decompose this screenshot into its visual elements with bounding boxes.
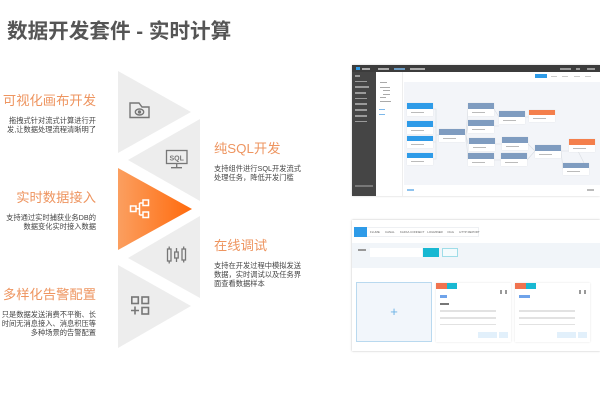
filter band bbox=[352, 243, 600, 268]
screenshot: connector config: HTTP REPORT bbox=[459, 230, 480, 234]
text block: visual canvas bbox=[3, 93, 96, 134]
filter label bbox=[358, 249, 366, 251]
text block: alert configuration bbox=[2, 287, 96, 336]
description: 多种场景的告警配置 bbox=[31, 328, 96, 336]
heading: 纯SQL开发 bbox=[214, 141, 280, 156]
heading: 实时数据接入 bbox=[16, 190, 96, 205]
text block: online debugging bbox=[214, 238, 301, 288]
screenshot: connector config: OGG bbox=[447, 230, 454, 234]
title: 数据开发套件 - 实时计算 bbox=[7, 20, 231, 42]
connector lines bbox=[433, 108, 584, 169]
description: 时间无消息接入、消息积压等 bbox=[2, 318, 96, 328]
tab strip bbox=[354, 227, 479, 237]
text block: realtime ingestion bbox=[6, 190, 96, 230]
triangle: pure SQL bbox=[128, 119, 200, 201]
description bbox=[214, 260, 301, 288]
add card: + bbox=[390, 304, 398, 319]
canvas bbox=[404, 82, 600, 185]
heading: 在线调试 bbox=[214, 238, 267, 253]
card one bbox=[436, 283, 511, 342]
description: 数据变化实时接入数据 bbox=[23, 222, 96, 230]
description bbox=[2, 310, 96, 336]
screenshot: connector config: LOGMINER bbox=[427, 230, 443, 234]
description: 发,让数据处理流程清晰明了 bbox=[7, 124, 96, 134]
canvas footer bbox=[407, 189, 414, 190]
toolbar buttons bbox=[535, 74, 547, 78]
triangle: alert configuration bbox=[118, 265, 191, 348]
search input bbox=[370, 248, 422, 257]
heading: 多样化告警配置 bbox=[3, 287, 96, 302]
screenshot: flow canvas bbox=[352, 65, 600, 196]
description: 只是数据发送消费不平衡、长 bbox=[2, 310, 96, 318]
tab labels: FLUME bbox=[370, 230, 380, 234]
card two bbox=[515, 283, 590, 342]
description: 面查看数据样本 bbox=[214, 278, 265, 288]
sidebar bbox=[352, 72, 376, 196]
description: 支持在开发过程中模拟发送 bbox=[214, 260, 301, 270]
heading: 可视化画布开发 bbox=[3, 93, 96, 108]
add card bbox=[356, 282, 432, 342]
flow nodes bbox=[407, 103, 433, 116]
search button bbox=[423, 248, 439, 257]
description: 支持组件进行SQL开发流式 bbox=[214, 164, 301, 172]
icon: folder with eye bbox=[130, 103, 149, 118]
icon: add grid bbox=[131, 297, 148, 314]
description bbox=[7, 116, 96, 134]
description bbox=[214, 164, 301, 182]
triangle: visual canvas bbox=[118, 71, 191, 153]
icon: SQL monitor: SQL bbox=[170, 156, 185, 162]
description: 处理任务，降低开发门槛 bbox=[214, 172, 294, 182]
top bar bbox=[352, 65, 600, 72]
icon: SQL monitor bbox=[166, 150, 187, 168]
description: 数据，实时调试以及任务界 bbox=[214, 270, 301, 278]
triangle: online debugging bbox=[128, 216, 200, 298]
icon: flow nodes bbox=[130, 200, 148, 218]
triangle: realtime ingestion bbox=[118, 168, 192, 250]
description: 支持通过实时捕获业务DB的 bbox=[6, 212, 96, 222]
screenshot: connector config bbox=[352, 220, 600, 351]
screenshot: connector config: KAFKA CONNECT bbox=[400, 230, 424, 234]
icon: candlesticks bbox=[168, 246, 186, 264]
tree panel bbox=[376, 72, 403, 196]
description bbox=[6, 212, 96, 230]
reset button bbox=[442, 248, 458, 257]
description: 拖拽式针对流式计算进行开 bbox=[9, 116, 96, 124]
text block: pure SQL bbox=[214, 141, 301, 182]
active tab bbox=[354, 227, 367, 237]
screenshot: connector config: CANAL bbox=[385, 230, 395, 234]
